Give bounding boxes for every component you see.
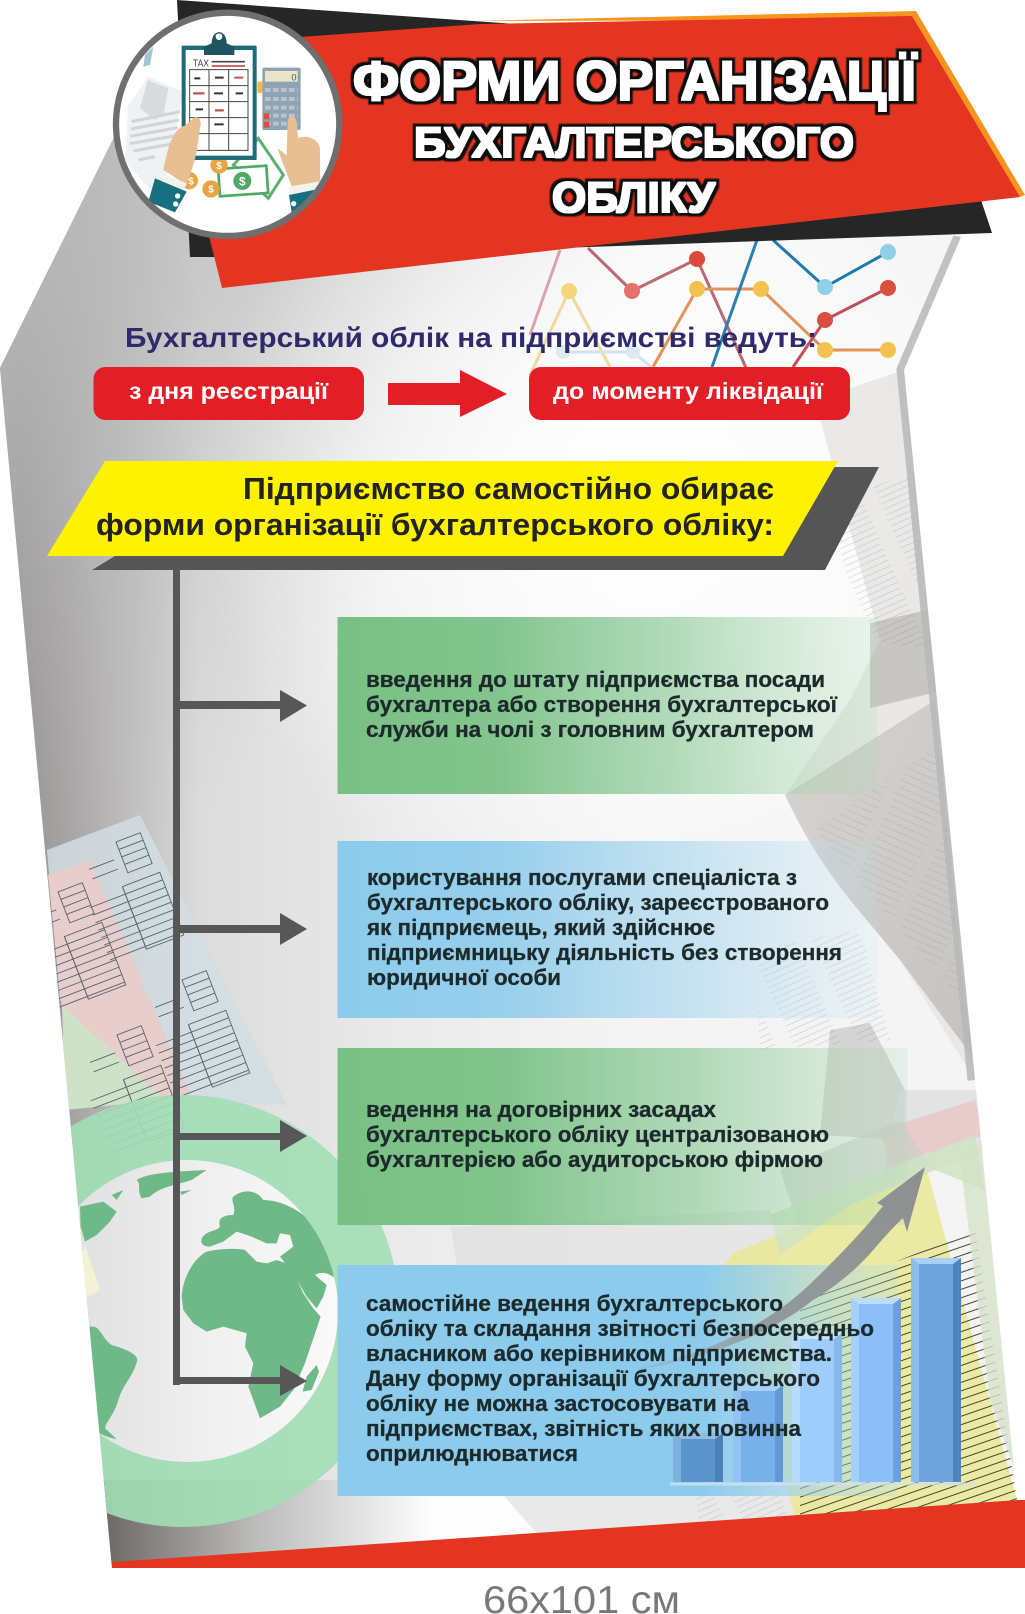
continent: Eurasia [201, 1191, 337, 1308]
bar 4 [851, 1298, 901, 1482]
box 4 text: self-accounting: Дану форму організації бухгалтерського [366, 1366, 820, 1391]
box 4 text: self-accounting: підприємствах, звітність яких повинна [366, 1416, 802, 1441]
box 4 text: self-accounting: обліку не можна застосовувати на [366, 1391, 750, 1416]
bar 3 [792, 1333, 842, 1482]
icon: calculator: 0 [291, 72, 297, 82]
box 4 text: self-accounting: власником або керівником підприємства. [366, 1341, 832, 1366]
icon: money and coins: $ [208, 185, 214, 196]
bar chart [670, 1258, 975, 1484]
line chart decoration [530, 240, 896, 375]
box 2: sole entrepreneur specialist: як підприємець, який здійснює [366, 915, 715, 940]
icon: accounting circle [116, 13, 339, 236]
left side tax forms [47, 815, 287, 1153]
continent: Greenland [137, 1170, 207, 1198]
continent: Africa [182, 1249, 321, 1418]
box 3: contract with central accounting: бухгалтерією або аудиторською фірмою [366, 1147, 823, 1172]
box 4 text: self-accounting: обліку та складання звітності безпосередньо [366, 1316, 874, 1341]
title text: БУХГАЛТЕРСЬКОГО [414, 119, 854, 167]
box 2: sole entrepreneur specialist: юридичної особи [367, 965, 561, 990]
island: Madagascar [303, 1365, 319, 1392]
box 1: in-house accountant: служби на чолі з головним бухгалтером [366, 717, 814, 742]
button: from registration: з дня реєстрації [129, 378, 329, 404]
box 2: sole entrepreneur specialist: бухгалтерського обліку, зареєстрованого [367, 890, 829, 915]
icon: clipboard with tax table [182, 32, 257, 160]
title text [353, 49, 917, 222]
icon: right hand [278, 116, 320, 212]
button: until liquidation [529, 367, 850, 420]
title banner [177, 0, 1025, 288]
box 1: in-house accountant: введення до штату підприємства посади [366, 667, 825, 692]
icon: paper sheet [125, 47, 183, 202]
right side paper sheets [755, 237, 990, 1230]
title text: ОБЛІКУ [552, 174, 716, 222]
box 4 text: self-accounting: самостійне ведення бухгалтерського [366, 1291, 783, 1316]
bar 5 [911, 1258, 961, 1482]
box 2: sole entrepreneur specialist: підприємницьку діяльність без створення [367, 940, 842, 965]
arrow: red [388, 370, 507, 417]
banner text [96, 471, 774, 542]
box 2: sole entrepreneur specialist [338, 841, 878, 1018]
continent: South America [90, 1326, 138, 1440]
button: from registration [94, 367, 364, 420]
title text: ФОРМИ ОРГАНІЗАЦІЇ [353, 49, 917, 112]
bottom centre and bottom right documents [451, 1120, 1017, 1560]
box 2: sole entrepreneur specialist: користування послугами спеціаліста з [367, 865, 797, 890]
arrow 1 [178, 690, 307, 722]
icon: left hand [148, 117, 201, 212]
icon: clipboard with tax table: TAX [193, 59, 209, 70]
box 1: in-house accountant: бухгалтера або створення бухгалтерської [366, 692, 838, 717]
icon: calculator [257, 68, 301, 130]
bar 1 [673, 1433, 723, 1482]
box 4 text: self-accounting: оприлюднюватися [366, 1441, 578, 1466]
yellow banner [47, 461, 879, 570]
globe [70, 1095, 394, 1527]
icon: money and coins [181, 138, 283, 198]
heading: accounting is kept: Бухгалтерський облік на підприємстві ведуть: [125, 322, 817, 353]
button: until liquidation: до моменту ліквідації [553, 378, 824, 404]
curved growth arrow [638, 1167, 925, 1370]
bar 2 [733, 1385, 783, 1482]
box 3: contract with central accounting: бухгалтерського обліку централізованою [366, 1122, 829, 1147]
box 3: contract with central accounting [338, 1048, 908, 1225]
box 1: in-house accountant [338, 617, 878, 794]
flow connector with arrows [173, 568, 307, 1396]
icon: money and coins: $ [188, 176, 194, 187]
arrow 3 [178, 1120, 307, 1152]
icon: money and coins: $ [239, 174, 246, 188]
box 3: contract with central accounting: ведення на договірних засадах [366, 1097, 717, 1122]
icon: money and coins: $ [216, 161, 222, 172]
arrow 2 [178, 913, 307, 945]
continent: North America [80, 1190, 192, 1242]
box 4 text: self-accounting [366, 1291, 874, 1466]
arrow 4 [173, 1365, 307, 1396]
banner text: Підприємство самостійно обирає [243, 471, 774, 506]
banner text: форми організації бухгалтерського обліку: [96, 507, 774, 542]
red bottom strip [112, 1500, 1025, 1568]
box 4 background [338, 1265, 898, 1496]
